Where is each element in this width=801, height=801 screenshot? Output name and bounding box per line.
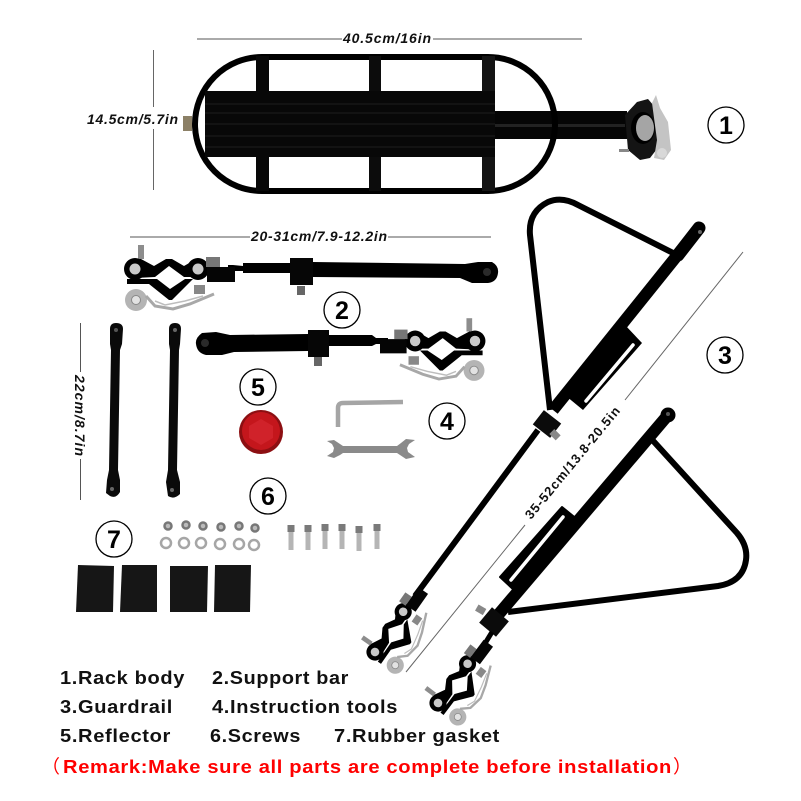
parts legend: line 3: 6.Screws xyxy=(210,725,301,746)
part 6: screws xyxy=(288,524,380,551)
number 5 xyxy=(240,369,276,405)
number 3 xyxy=(707,337,743,373)
dimension: guardrail length xyxy=(406,252,743,672)
part 1: rack body xyxy=(183,56,671,191)
dimension: guardrail length: 35-52cm/13.8-20.5in xyxy=(522,404,623,522)
number 4: 4 xyxy=(440,408,454,436)
parts legend: line 3: 5.Reflector xyxy=(60,725,171,746)
number 2: 2 xyxy=(335,297,349,325)
number 7 xyxy=(96,521,132,557)
number 7: 7 xyxy=(107,526,121,554)
parts legend: line 3 xyxy=(60,725,500,746)
part 5: reflector xyxy=(239,410,283,454)
number 6: 6 xyxy=(261,483,275,511)
parts legend: line 3: 7.Rubber gasket xyxy=(334,725,500,746)
number 2 xyxy=(324,292,360,328)
part 4: wrench xyxy=(327,439,415,459)
dimension: rack width xyxy=(87,50,178,190)
parts legend: line 1 xyxy=(60,667,349,688)
part 3: lower guardrail xyxy=(418,408,746,730)
part 6: nuts and washers xyxy=(161,522,259,550)
remark xyxy=(42,753,692,779)
part 4: allen key xyxy=(338,402,403,427)
remark: Remark:Make sure all parts are complete before installation xyxy=(63,756,672,777)
parts legend: line 1: 1.Rack body xyxy=(60,667,185,688)
number 1: 1 xyxy=(719,112,733,140)
dimension: strut length: 22cm/8.7in xyxy=(72,374,88,456)
number 6 xyxy=(250,478,286,514)
parts legend: line 2: 3.Guardrail xyxy=(60,696,173,717)
dimension: support bar length: 20-31cm/7.9-12.2in xyxy=(250,228,387,244)
remark: ） xyxy=(673,753,692,779)
part 2: upper support bar xyxy=(124,245,498,311)
parts legend: line 2: 4.Instruction tools xyxy=(212,696,398,717)
part 2: straight struts xyxy=(106,323,181,498)
dimension: rack length: 40.5cm/16in xyxy=(342,30,431,46)
parts legend: line 1: 2.Support bar xyxy=(212,667,349,688)
part 2: lower support bar xyxy=(196,318,485,381)
remark: （ xyxy=(42,753,60,779)
part 3: upper guardrail xyxy=(355,200,702,678)
number 5: 5 xyxy=(251,374,265,402)
seatpost clamp xyxy=(619,95,671,160)
dimension: rack width: 14.5cm/5.7in xyxy=(87,111,178,127)
number 3: 3 xyxy=(718,342,732,370)
parts legend: line 2 xyxy=(60,696,398,717)
number 1 xyxy=(708,107,744,143)
number 4 xyxy=(429,403,465,439)
part 7: rubber gaskets xyxy=(76,565,251,612)
